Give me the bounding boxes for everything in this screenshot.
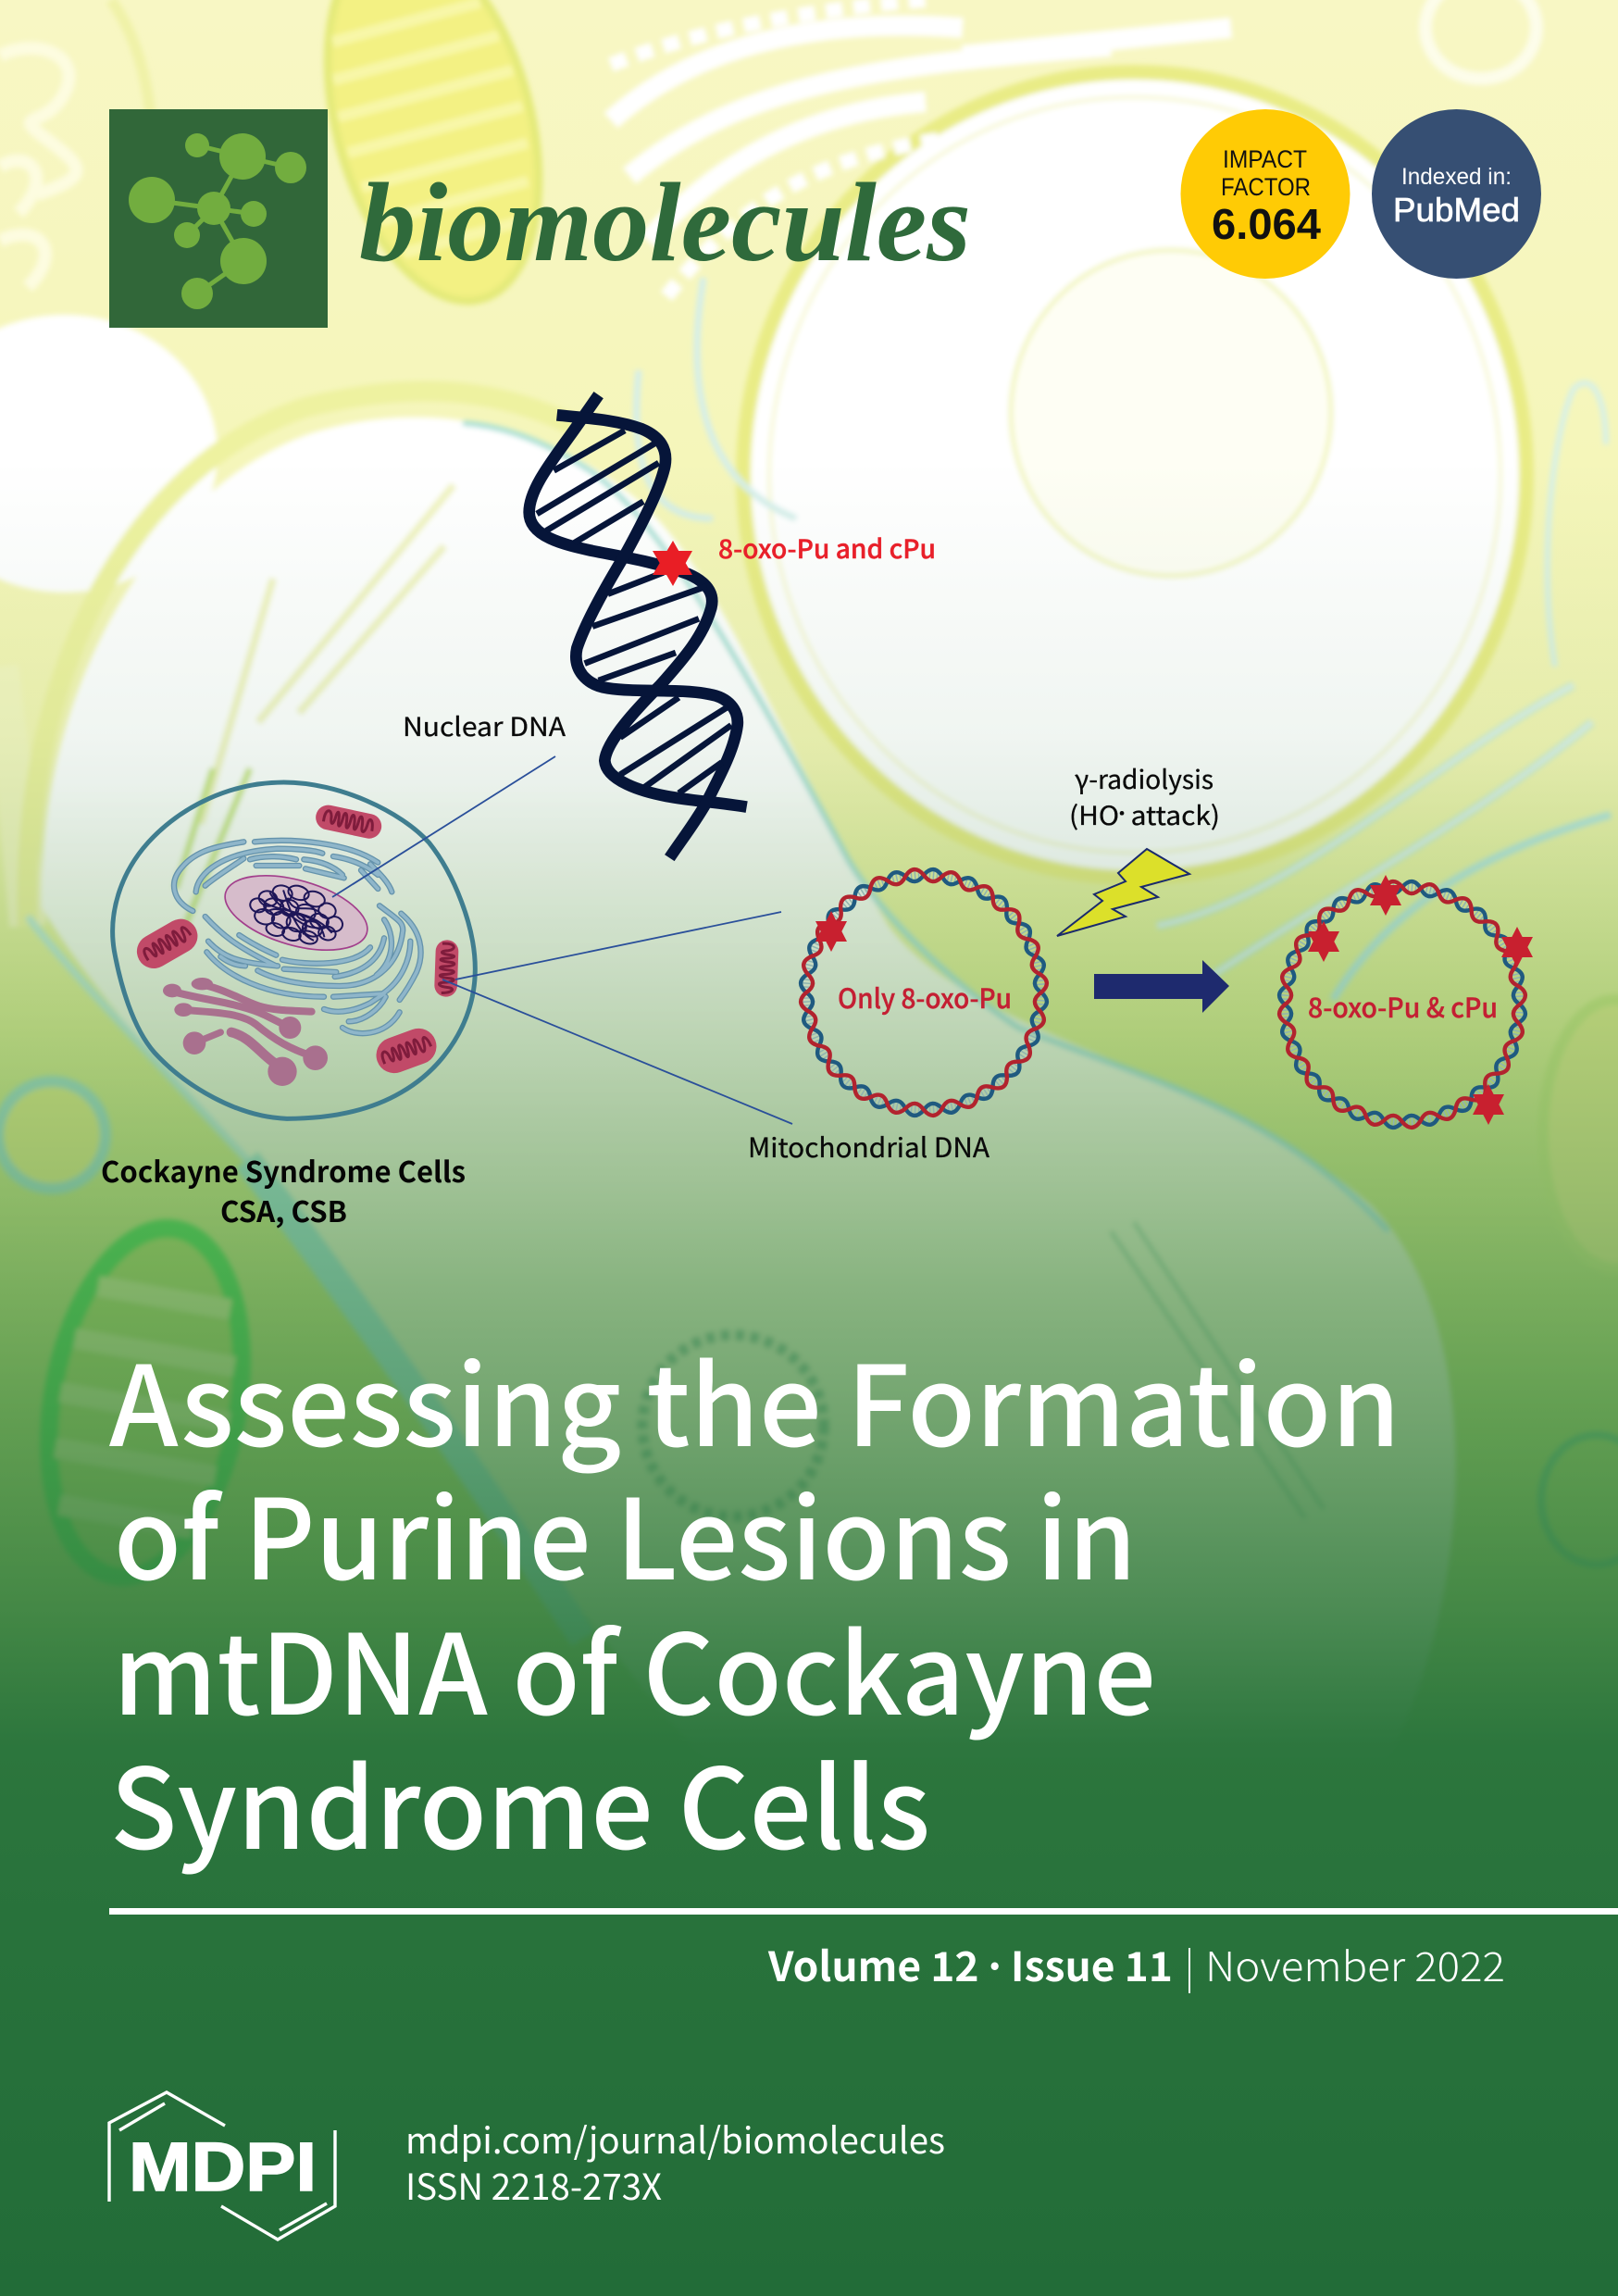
background: bottom left mitochondrion [24, 1214, 267, 1591]
background: pale ER tubes [611, 26, 1231, 241]
label: Only 8-oxo-Pu: Only 8-oxo-Pu [838, 978, 1012, 1017]
MDPI logo: MDPI [129, 2128, 317, 2205]
label: Cockayne Syndrome Cells: CSA, CSB [220, 1189, 347, 1230]
label: Cockayne Syndrome Cells: Cockayne Syndrome Cells [101, 1149, 466, 1191]
nuclear DNA double helix [529, 395, 747, 858]
badge: indexed in PubMed: Indexed in: [1401, 164, 1512, 190]
background: white blob upper left [0, 315, 218, 593]
badge: impact factor: IMPACT [1223, 145, 1307, 173]
background: right ER stripes [1157, 685, 1611, 1000]
badge: impact factor: FACTOR [1221, 173, 1311, 201]
mitochondria [314, 803, 384, 841]
article title [109, 1317, 1400, 1881]
chromatin [243, 874, 350, 953]
label: gamma radiolysis: attack) [1125, 796, 1220, 833]
label: 8-oxo-Pu & cPu: 8-oxo-Pu & cPu [1308, 987, 1498, 1026]
label: gamma radiolysis [1069, 760, 1220, 833]
label: gamma radiolysis: • [1119, 800, 1125, 822]
journal URL and ISSN: mdpi.com/journal/biomolecules [405, 2113, 945, 2165]
plasmid: only 8-oxo-Pu [783, 852, 1064, 1133]
MDPI logo [109, 2092, 335, 2240]
label: Mitochondrial DNA: Mitochondrial DNA [748, 1127, 989, 1166]
background: gear circle [642, 1335, 824, 1516]
star: lesion marker on nuclear DNA [653, 541, 692, 586]
label: 8-oxo-Pu and cPu: 8-oxo-Pu and cPu [718, 530, 936, 567]
golgi tubules [169, 984, 315, 1063]
label: Cockayne Syndrome Cells [101, 1149, 466, 1230]
label: Nuclear DNA: Nuclear DNA [403, 707, 566, 744]
background: pale rods in left cell [201, 485, 454, 824]
background: diagonal rods [1111, 1222, 1324, 1518]
icon: lightning bolt [1057, 849, 1189, 936]
arrow [1094, 960, 1229, 1013]
divider rule [109, 1908, 1618, 1915]
journal logo tile [109, 109, 328, 328]
background: yellow ring left edge [0, 667, 28, 926]
background: large left cell [42, 418, 1456, 1759]
nucleus [217, 861, 376, 965]
cell diagram [113, 782, 475, 1118]
journal URL and ISSN [405, 2113, 945, 2211]
article title: Assessing the Formation [109, 1317, 1400, 1479]
plasmid: 8-oxo-Pu and cPu [1262, 864, 1543, 1145]
background: cell nucleus [1011, 250, 1331, 576]
badge: indexed in PubMed [1372, 109, 1541, 279]
leader lines: mitochondrial DNA [442, 912, 792, 1124]
article title: mtDNA of Cockayne [113, 1586, 1156, 1747]
volume and issue [767, 1934, 1505, 1993]
journal URL and ISSN: ISSN 2218-273X [405, 2159, 662, 2211]
badge: impact factor [1181, 109, 1350, 279]
cell membrane [113, 782, 475, 1118]
label: gamma radiolysis: γ-radiolysis [1075, 760, 1214, 797]
background: large right cell [743, 72, 1526, 878]
endoplasmic reticulum [174, 841, 421, 1033]
star marker [815, 911, 847, 952]
volume and issue: November 2022 [1205, 1934, 1505, 1993]
badge: impact factor: 6.064 [1212, 200, 1321, 248]
badge: indexed in PubMed: PubMed [1393, 191, 1520, 229]
background: top left organelle wiggles [0, 48, 76, 287]
star markers [1308, 875, 1533, 1125]
journal name: biomolecules [359, 160, 971, 285]
background: bottom-left circle [0, 1081, 106, 1189]
leader line: nuclear DNA [332, 756, 555, 897]
volume and issue: Volume 12 · Issue 11 [767, 1934, 1173, 1993]
background: right edge mitochondrion [1543, 1000, 1618, 1268]
article title: of Purine Lesions in [114, 1451, 1137, 1612]
label: gamma radiolysis: (HO [1069, 796, 1116, 833]
background: top right small circle [1425, 0, 1537, 79]
background: striped mitochondrion top centre [292, 0, 575, 324]
article title: Syndrome Cells [110, 1720, 930, 1881]
